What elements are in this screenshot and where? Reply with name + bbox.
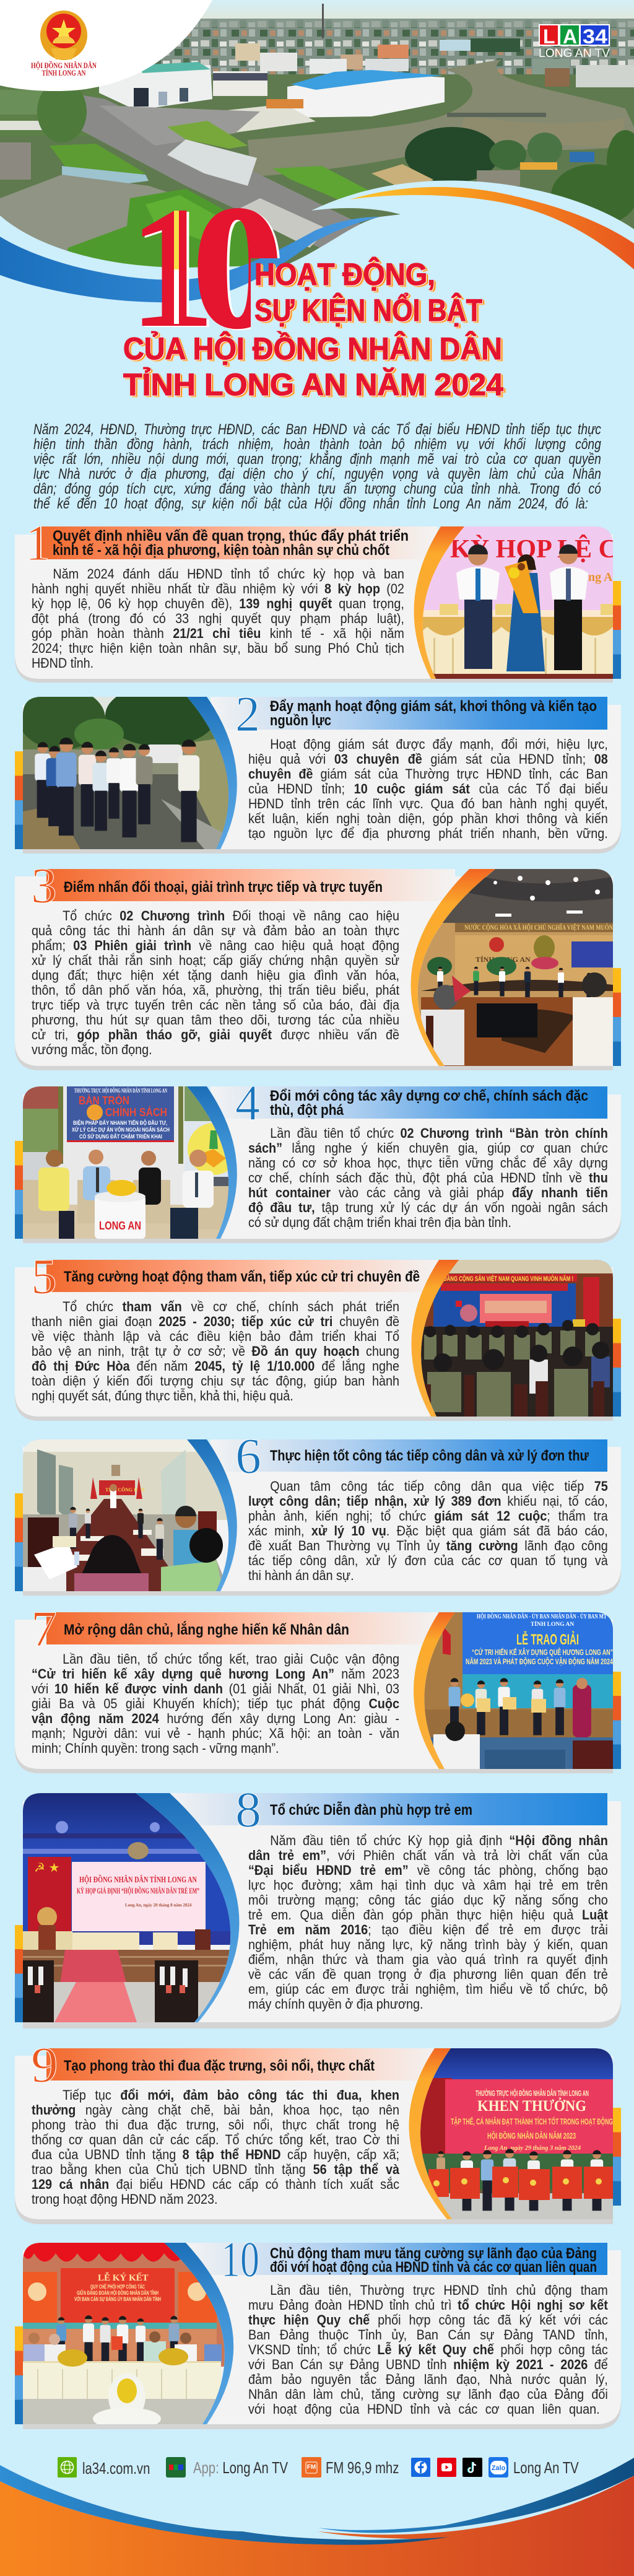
panel 3: dialogue <box>15 869 621 1070</box>
photo: round-table studio <box>23 1086 240 1239</box>
aerial photo of Tan An city <box>0 0 634 285</box>
body text: Năm đầu tiên tổ chức Kỳ họp giả định “Hội đồng nhân <box>270 1833 608 1848</box>
colour strip <box>15 751 23 849</box>
body text: Quan tâm công tác tiếp công dân qua việc tiếp 75 <box>270 1478 608 1494</box>
big number 10 <box>142 208 280 331</box>
left blue swoosh <box>0 2465 449 2545</box>
body text: Tổ chức 02 Chương trình Đối thoại về nâng cao hiệu <box>63 908 399 923</box>
body text: góp phần hoàn thành 21/21 chỉ tiêu kinh tế - xã hội năm <box>32 626 404 641</box>
card shadow <box>15 1267 613 1421</box>
card shadow <box>15 535 613 683</box>
body text: đô thị Đức Hòa đến năm 2045, tỷ lệ 1/10.000 để lắng nghe <box>32 1358 399 1374</box>
body text <box>32 566 404 671</box>
photo: mock council session stage <box>23 1793 233 2022</box>
intro paragraph: thể kể đến 10 hoạt động, sự kiện nổi bật của Hội đồng nhân tỉnh Long An năm 2024, đó là: <box>33 496 588 512</box>
header band <box>46 869 455 901</box>
body text <box>248 1125 608 1230</box>
studio board: CÓ SỬ DỤNG ĐẤT CHẬM TRIỂN KHAI <box>79 1133 162 1140</box>
body text: Ban Đảng thuộc Tỉnh ủy, Ban Cán sự Đảng TAND tỉnh, <box>248 2327 608 2342</box>
intro paragraph: lực Nhà nước ở địa phương, đại diện cho ý chí, nguyện vọng và quyền làm chủ của Nhân <box>33 466 601 482</box>
intro paragraph: dân; đóng góp tích cực, xứng đáng vào thành tựu ấn tượng chung của tỉnh nhà. Trong đó có <box>33 481 601 497</box>
photo: leaders on stage with flowers: ng A <box>588 570 613 584</box>
header text: thù, đột phá <box>270 1102 344 1119</box>
body text: trẻ em. Qua diễn đàn góp phần thực hiện hiệu quả Luật <box>248 1907 608 1923</box>
colour strip <box>613 1319 621 1417</box>
card shadow <box>15 2056 613 2224</box>
pond <box>0 175 167 260</box>
radio frequency: FM 96,9 mhz <box>326 2458 399 2477</box>
blue arc <box>164 2243 233 2424</box>
card shadow <box>15 876 613 1070</box>
orange arc <box>414 526 464 679</box>
body text: kết luận, kiến nghị toàn diện, góp phần khơi thông và kiến <box>248 811 608 826</box>
photo: commendation ceremony: Long An, ngày 29 tháng 3 năm 2024 <box>484 2145 581 2152</box>
main title: HOẠT ĐỘNG, <box>254 256 435 292</box>
blue arc <box>187 1439 237 1591</box>
body text: bảo vệ an ninh, trật tự ở cơ sở; về Đồ án quy hoạch chung <box>32 1343 399 1359</box>
header text: Tạo phong trào thi đua đặc trưng, sôi nổi, thực chất <box>64 2058 375 2074</box>
studio board: BÀN TRÒN <box>79 1094 129 1107</box>
panel 10: party leadership <box>15 2243 621 2429</box>
body text: về việc thành lập và các điều kiện bảo đảm triển khai Tổ <box>32 1329 399 1344</box>
body text: với 10 hiến kế được vinh danh (01 giải Nhất, 01 giải Nhì, 03 <box>32 1681 399 1696</box>
icon: TikTok <box>462 2458 482 2477</box>
body text: HĐND tỉnh. <box>32 655 93 671</box>
panel 9: emulation movement <box>15 2048 621 2224</box>
header text: Tổ chức Diễn đàn phù hợp trẻ em <box>270 1801 472 1818</box>
body text: điểm, nhận thức và tham gia vào quá trình ra quyết định <box>248 1952 608 1967</box>
colour strip <box>613 581 621 679</box>
emblem caption <box>31 61 97 77</box>
intro paragraph: hiện tinh thần đồng hành, trách nhiệm, hoàn thành toàn bộ nhiệm vụ với khối lượng công <box>33 436 601 453</box>
body text: thực hiện Quy chế phối hợp công tác đã ký kết với các <box>248 2312 608 2328</box>
body text: hút container vào các cảng và giải pháp đẩy nhanh tiến <box>248 1185 608 1200</box>
body text: với Ban Cán sự Đảng UBND tỉnh nhiệm kỳ 2021 - 2026 để <box>248 2357 608 2372</box>
body text: thanh niên giai đoạn 2025 - 2030; tiếp xúc cử tri chuyên đề <box>32 1314 399 1329</box>
colour strip <box>15 1493 23 1591</box>
card <box>15 876 613 1066</box>
body text: 2024; thực hiện kiện toàn nhân sự, bầu bổ sung Phó Chủ tịch <box>32 640 404 656</box>
logo: LA34 Long An TV: L <box>543 25 555 48</box>
main title: SỰ KIỆN NỔI BẬT <box>254 292 482 328</box>
photo: field inspection group <box>23 697 229 849</box>
body text: đề xuất Ban Thường vụ Tỉnh ủy tăng cường lãnh đạo công <box>248 1538 608 1553</box>
body text: dân trẻ em”, với Phiên chất vấn và trả lời chất vấn của <box>248 1848 608 1863</box>
body text: Lần đầu tiên tổ chức 02 Chương trình “Bàn tròn chính <box>270 1125 608 1141</box>
body text: chuyên đề giám sát của Thường trực HĐND tỉnh, các Ban <box>248 766 608 782</box>
body text: hành nghị quyết nhiều nhất từ đầu nhiệm kỳ với 8 kỳ họp (02 <box>32 581 404 596</box>
header text: Tăng cường hoạt động tham vấn, tiếp xúc cử tri chuyên đề <box>64 1268 420 1285</box>
icon: Zalo: Zalo <box>492 2465 506 2472</box>
body text: trao bằng khen của Chủ tịch UBND tỉnh tặng 56 tập thể và <box>32 2162 399 2177</box>
photo: mock council session stage: Long An, ngày 20 tháng 8 năm 2024 <box>125 1903 192 1908</box>
body text: em, giúp các em được trải nghiệm, tìm hiểu về tổ chức, bộ <box>248 1981 608 1997</box>
photo: commendation ceremony: HỘI ĐỒNG NHÂN DÂN NĂM 2023 <box>487 2131 576 2141</box>
body text: Lần đầu tiên, tổ chức tổng kết, trao giải Cuộc vận động <box>63 1651 399 1667</box>
card <box>23 705 621 849</box>
header text: Đổi mới công tác xây dựng cơ chế, chính sách đặc <box>270 1088 588 1104</box>
header text: Mở rộng dân chủ, lắng nghe hiến kế Nhân dân <box>64 1621 349 1638</box>
card shadow <box>23 1094 621 1243</box>
header text <box>270 1088 588 1119</box>
colour strip <box>613 968 621 1066</box>
card <box>23 2250 621 2424</box>
orange base <box>0 2476 634 2576</box>
logo: LA34 Long An TV: LONG AN TV <box>539 47 610 60</box>
header band <box>186 2243 607 2275</box>
card <box>23 1094 621 1239</box>
emblem caption: TỈNH LONG AN <box>42 69 85 77</box>
body text: vướng mắc, tồn đọng. <box>32 1042 152 1057</box>
body text: trực tiếp và trực tuyến trên các nền tảng số của báo, đài địa <box>32 997 399 1013</box>
photo: leaders on stage with flowers <box>409 526 619 679</box>
orange arc <box>409 2048 452 2219</box>
body text <box>248 736 608 841</box>
colour strip <box>613 1672 621 1769</box>
big number 10: 0 <box>193 170 283 364</box>
icon: website <box>58 2457 77 2478</box>
photo: meeting hall <box>409 869 619 1067</box>
body text: lượt công dân; tiếp nhận, xử lý 389 đơn khiếu nại, tố cáo, <box>248 1493 608 1509</box>
body text <box>248 2282 608 2417</box>
card shadow <box>23 1801 621 2028</box>
body text: Trẻ em năm 2016; tạo điều kiện để trẻ em được trải <box>248 1922 608 1937</box>
photo: commendation ceremony <box>409 2048 619 2219</box>
body text: Nhân dân làm chủ, tăng cường sự lãnh đạo của Đảng đối <box>248 2386 608 2402</box>
body text: dụng đất; thực hiện xét tặng danh hiệu gia đình văn hóa, <box>32 967 399 983</box>
orange swoosh <box>350 187 634 269</box>
studio board: XỬ LÝ CÁC DỰ ÁN VỐN NGOÀI NGÂN SÁCH <box>72 1126 170 1133</box>
body text <box>32 1651 399 1756</box>
body text: về các vấn đề quan trọng ở địa phương liên quan đến trẻ <box>248 1967 608 1982</box>
studio board: THƯỜNG TRỰC HỘI ĐỒNG NHÂN DÂN TỈNH LONG AN <box>74 1088 167 1094</box>
hero banner: aerial city photo with curved waves <box>0 0 634 402</box>
card <box>15 1620 613 1769</box>
header text: Điểm nhấn đối thoại, giải trình trực tiếp và trực tuyến <box>64 879 383 896</box>
body text: với hoạt động của HĐND tỉnh và các cơ quan liên quan. <box>248 2401 600 2417</box>
body text: mạnh; Người dân: vui vẻ - hạnh phúc; Xã hội: an toàn - văn <box>32 1726 399 1741</box>
card <box>15 1267 613 1417</box>
body text: môi trường mạng; công tác giáo dục kỹ năng sống cho <box>248 1892 608 1908</box>
body text: Hoạt động giám sát được đẩy mạnh, đổi mới, hiệu lực, <box>270 736 608 752</box>
footer contact row <box>58 2457 579 2478</box>
colour strip <box>15 1925 23 2022</box>
body text: “Đại biểu HĐND trẻ em” về công tác phòng, chống bạo <box>248 1862 608 1878</box>
body text: của HĐND tỉnh; 10 cuộc giám sát của các Tổ đại biểu <box>248 781 608 797</box>
body text: cơ chế, chính sách đặc thù, đột phá của HĐND tỉnh về thu <box>248 1170 608 1185</box>
intro paragraph: Năm 2024, HĐND, Thường trực HĐND, các Ban HĐND và các Tổ đại biểu HĐND tỉnh tiếp tục thực <box>33 421 601 438</box>
header text: nguồn lực <box>270 712 331 729</box>
intro paragraph: việc rất lớn, nhiều nội dung mới, quan trọng; khẳng định mạnh mẽ vai trò của cơ quan quyền <box>33 451 601 468</box>
big number 10: 1 <box>128 170 215 364</box>
photo: signing ceremony: GIỮA ĐẢNG ĐOÀN HỘI ĐỒNG NHÂN DÂN TỈNH <box>77 2289 158 2296</box>
panel 7: democracy <box>15 1612 621 1773</box>
photo: mock council session stage: ☭ ★ <box>34 1861 59 1875</box>
intro paragraph <box>33 421 601 512</box>
white mall <box>99 65 212 110</box>
body text: phẩm; 03 Phiên giải trình về nâng cao hiệu quả hoạt động <box>32 938 399 953</box>
photo: award ceremony <box>424 1612 613 1769</box>
body text: máy chính quyền ở địa phương. <box>248 1996 423 2012</box>
app name: App: Long An TV <box>193 2458 288 2477</box>
trees on right <box>405 127 499 183</box>
body text: năng có cơ sở khoa học, thực tiễn vững chắc để xây dựng <box>248 1155 608 1171</box>
body text: mưu Đảng đoàn HĐND tỉnh chủ trì tổ chức Hội nghị sơ kết <box>248 2297 608 2313</box>
body text: vận động năm 2024 hướng đến xây dựng Long An: giàu - <box>32 1711 399 1726</box>
logo: LA34 Long An TV: 34 <box>583 25 607 48</box>
photo: signing ceremony: VỚI BAN CÁN SỰ ĐẢNG ỦY BAN NHÂN DÂN TỈNH <box>74 2295 161 2302</box>
body text: tác tiếp công dân, xử lý đơn của các cơ quan tố tụng và <box>248 1553 608 1568</box>
body text <box>32 2087 400 2207</box>
photo: citizen reception room <box>23 1439 233 1591</box>
panel 6: citizen reception <box>15 1439 621 1596</box>
colour strip <box>15 1141 23 1239</box>
card <box>15 535 613 679</box>
photo: signing ceremony: LỄ KÝ KẾT <box>98 2272 149 2283</box>
panel 4: mechanisms and policies <box>15 1086 621 1243</box>
studio board: CHÍNH SÁCH <box>105 1106 167 1119</box>
river <box>248 59 634 177</box>
body text <box>248 1478 608 1583</box>
header text <box>270 2245 597 2276</box>
header band <box>46 2048 443 2080</box>
header text: Quyết định nhiều vấn đề quan trọng, thúc đẩy phát triển <box>53 528 409 544</box>
icon: Zalo <box>489 2457 508 2478</box>
card shadow <box>23 2250 621 2429</box>
body text: sách” lắng nghe ý kiến chuyên gia, giúp cơ quan chức <box>248 1140 608 1156</box>
logo: LA34 Long An TV <box>539 24 610 60</box>
main title <box>123 256 503 402</box>
header band <box>211 697 607 730</box>
orange arc <box>414 1612 455 1769</box>
photo: commendation ceremony: KHEN THƯỞNG <box>477 2097 586 2115</box>
orange arc <box>411 869 495 1066</box>
body text: tạo nguồn lực để địa phương phát triển nhanh, bền vững. <box>248 826 608 841</box>
body text: minh; Chính quyền: trong sạch - vững mạnh”. <box>32 1740 279 1756</box>
card shadow <box>23 705 621 854</box>
body text: thống cơ quan dân cử các cấp. Tổ chức tổng kết, trao Cờ thi <box>32 2132 399 2147</box>
light blue wave <box>0 180 634 421</box>
icon: Facebook <box>411 2458 430 2477</box>
card <box>23 1801 621 2022</box>
card <box>15 2056 613 2219</box>
blue arc <box>187 697 237 849</box>
body text: HĐND tỉnh trên các lĩnh vực. Qua đó ban hành nghị quyết, <box>248 796 608 811</box>
icon: YouTube <box>437 2458 456 2477</box>
lower green bank <box>62 189 260 273</box>
bottom wave decoration <box>0 2458 634 2576</box>
header text <box>270 698 597 729</box>
body text: lực học đường; xâm hại tình dục và xâm hại trẻ em trên <box>248 1877 608 1893</box>
blue arc <box>187 1086 237 1239</box>
body text: quả công tác thi hành án dân sự và đảm bảo an toàn thực <box>32 923 399 938</box>
header band <box>167 1793 607 1825</box>
emblem caption: HỘI ĐỒNG NHÂN DÂN <box>31 61 97 70</box>
body text: phản ảnh, kiến nghị; tổ chức giám sát 12 cuộc; thẩm tra <box>248 1508 608 1524</box>
body text: thi hành án dân sự. <box>248 1568 354 1583</box>
body text: xác minh, xử lý 10 vụ. Đặc biệt qua giám sát đã báo cáo, <box>248 1523 608 1539</box>
big number 10: 0 <box>195 172 285 365</box>
studio board: BIỆN PHÁP ĐẨY NHANH TIẾN ĐỘ ĐẦU TƯ, <box>73 1119 167 1127</box>
header band <box>211 1086 607 1119</box>
panel 8: children forum <box>15 1793 621 2028</box>
body text: có sử dụng đất chậm triển khai trên địa bàn tỉnh. <box>248 1215 511 1230</box>
body text: kỳ họp lệ, 06 kỳ họp chuyên đề), 139 nghị quyết quan trọng, <box>32 596 404 611</box>
body text <box>248 1833 608 2012</box>
body text: độ đầu tư, tập trung xử lý các dự án vốn ngoài ngân sách <box>248 1200 608 1215</box>
card shadow <box>23 1447 621 1596</box>
photo: award ceremony: TỈNH LONG AN <box>531 1620 574 1628</box>
orange arc <box>411 1260 459 1417</box>
panel 2: supervision <box>15 697 621 854</box>
icon: national emblem <box>40 11 87 60</box>
main title: CỦA HỘI ĐỒNG NHÂN DÂN <box>123 331 502 366</box>
white centre building with blue roof <box>287 73 445 118</box>
header band <box>46 1612 443 1644</box>
top-left white circle <box>0 0 212 91</box>
photo: voter meeting hall: ĐẢNG CỘNG SẢN VIỆT NAM QUANG VINH MUÔN NĂM ! <box>443 1275 573 1283</box>
photo: signing ceremony <box>23 2243 233 2430</box>
card <box>23 1447 621 1591</box>
panel 5: consultation <box>15 1260 621 1421</box>
colour strip <box>613 2108 621 2206</box>
body text: đảm bảo nguyên tắc Đảng lãnh đạo, Nhà nước quản lý, <box>248 2372 608 2387</box>
body text: xử lý chất thải rắn sinh hoạt; cấp giấy chứng nhận quyền sử <box>32 953 399 968</box>
studio board <box>67 1086 174 1142</box>
main title: TỈNH LONG AN NĂM 2024 <box>123 367 503 402</box>
colour strip <box>15 2326 23 2424</box>
body text: đột phá (trong đó có 33 nghị quyết quy phạm pháp luật), <box>32 611 404 626</box>
header text: kinh tế - xã hội địa phương, kiện toàn nhân sự chủ chốt <box>53 542 389 559</box>
body text: phương, thu hút sự quan tâm theo dõi, tương tác của nhiều <box>32 1012 399 1028</box>
body text: giải Ba và 05 giải Khuyến khích); tiếp tục phát động Cuộc <box>32 1696 399 1711</box>
body text <box>32 908 399 1057</box>
icon: FM radio: FM <box>307 2464 316 2471</box>
header band <box>46 1260 443 1292</box>
body text: cử tri, góp phần tháo gỡ, giải quyết được nhiều vấn đề <box>32 1027 399 1042</box>
body text: đua của UBND tỉnh tặng 8 tập thể HĐND cấp huyện, cấp xã; <box>32 2147 399 2162</box>
body text: toàn diện ý kiến đối tượng chịu sự tác động, giúp ban hành <box>32 1373 399 1389</box>
panel 1: key decisions <box>15 526 621 683</box>
body text: “Cử tri hiến kế xây dựng quê hương Long An” năm 2023 <box>32 1666 399 1682</box>
green islands <box>50 144 145 181</box>
header band <box>41 526 438 559</box>
website address: la34.com.vn <box>82 2459 150 2478</box>
body text: trong hoạt động HĐND năm 2023. <box>32 2191 217 2207</box>
body text: thôn, tổ dân phố văn hóa, xã, phường, thị trấn tiêu biểu, phát <box>32 982 399 998</box>
icon: FM radio <box>302 2457 321 2478</box>
body text: VKSND tỉnh; tổ chức Lễ ký kết Quy chế phối hợp công tác <box>248 2342 608 2357</box>
logo: LA34 Long An TV: A <box>563 25 577 48</box>
body text: nghiệm, phát huy năng lực, kỹ năng trình bày ý kiến, quan <box>248 1937 608 1952</box>
roads <box>62 92 371 260</box>
body text: Năm 2024 đánh dấu HĐND tỉnh tổ chức kỳ họp và ban <box>53 566 404 582</box>
body text: Lần đầu tiên, Thường trực HĐND tỉnh chủ động tham <box>270 2282 608 2298</box>
photo: voter meeting hall <box>409 1260 619 1417</box>
body text: Tiếp tục đổi mới, đảm bảo công tác thi đua, khen <box>63 2087 399 2103</box>
card shadow <box>15 1620 613 1773</box>
body text: hiệu quả với 03 chuyên đề giám sát của HĐND tỉnh; 08 <box>248 751 608 767</box>
photo: citizen reception room: TIẾP CÔNG DÂN <box>105 1487 145 1493</box>
header text <box>53 528 409 559</box>
photo: round-table studio: LONG AN <box>99 1220 141 1232</box>
body text: 129 cá nhân đại biểu HĐND các cấp có thành tích xuất sắc <box>32 2177 399 2192</box>
body text: phong trào thi đua đặc trưng, sôi nổi, thực chất trong hệ <box>32 2117 399 2133</box>
blue arc <box>136 1793 240 2022</box>
social account name: Long An TV <box>513 2458 579 2477</box>
photo: meeting hall: TỈNH LONG AN <box>476 955 531 964</box>
body text: Tổ chức tham vấn về cơ chế, chính sách phát triển <box>63 1299 399 1314</box>
photo: leaders on stage with flowers: KỲ HỌP LỆ C <box>450 535 617 564</box>
body text: thưởng ngày càng chặt chẽ, bài bản, khoa học, tạo nên <box>32 2102 399 2118</box>
right blue swoosh <box>318 2458 634 2533</box>
photo: mock council session stage: HỘI ĐỒNG NHÂN DÂN TỈNH LONG AN <box>79 1874 197 1885</box>
body text <box>32 1299 399 1404</box>
header band <box>211 1439 607 1472</box>
photo: mock council session stage: KỲ HỌP GIẢ ĐỊNH “HỘI ĐỒNG NHÂN DÂN TRẺ EM” <box>77 1886 199 1895</box>
body text: nghị quyết sát, đúng thực tiễn, khả thi, hiệu quả. <box>32 1388 293 1404</box>
blue swoosh <box>0 217 380 302</box>
big number 10: 1 <box>131 172 218 365</box>
photo: award ceremony: LỄ TRAO GIẢI <box>516 1630 579 1648</box>
icon: app <box>166 2457 186 2478</box>
photo: signing ceremony: QUY CHẾ PHỐI HỢP CÔNG TÁC <box>90 2283 145 2290</box>
